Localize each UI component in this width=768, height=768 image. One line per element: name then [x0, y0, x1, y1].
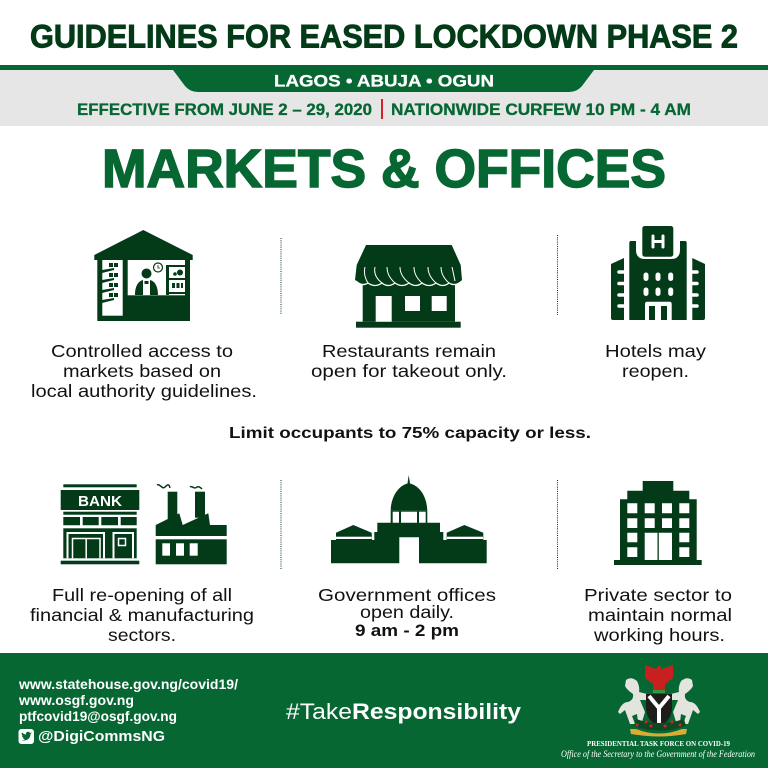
icon: restaurant: [355, 245, 462, 328]
text: government: Government offices: [318, 585, 496, 605]
text: government: [318, 585, 496, 640]
header band: NATIONWIDE CURFEW 10 PM - 4 AM: [391, 100, 691, 119]
text: hotels: reopen.: [622, 361, 689, 381]
footer panel: [0, 653, 768, 768]
text: finance: sectors.: [108, 625, 176, 645]
text: restaurants: open for takeout only.: [311, 361, 507, 381]
text: private sector: maintain normal: [588, 605, 732, 625]
header band: [0, 65, 768, 126]
coat of arms: [618, 665, 700, 736]
contact details: @DigiCommsNG: [38, 728, 165, 745]
text: hotels: [605, 341, 706, 381]
text: markets: markets based on: [63, 361, 221, 381]
text: markets: [31, 341, 257, 401]
icon: factory: [156, 485, 227, 564]
title: GUIDELINES FOR EASED LOCKDOWN PHASE 2: [30, 18, 738, 54]
text: private sector: Private sector to: [584, 585, 732, 605]
dividers: [281, 235, 558, 570]
icon: government building: [331, 475, 487, 563]
hashtag: #Take Responsibility: [286, 699, 522, 724]
text: finance: financial & manufacturing: [30, 605, 254, 625]
text: private sector: working hours.: [593, 625, 725, 645]
main heading: MARKETS & OFFICES: [102, 139, 666, 199]
contact details: [18, 677, 238, 745]
icon: bank: [61, 484, 139, 564]
text: markets: local authority guidelines.: [31, 381, 257, 401]
text: government: 9 am - 2 pm: [355, 621, 459, 640]
contact details: www.statehouse.gov.ng/covid19/: [18, 677, 238, 692]
icon: bank: BANK: [78, 493, 122, 510]
text: private sector: [584, 585, 732, 645]
capacity note: Limit occupants to 75% capacity or less.: [229, 425, 591, 442]
task force caption: [561, 739, 755, 759]
text: restaurants: [311, 341, 507, 381]
text: markets: Controlled access to: [51, 341, 233, 361]
text: government: open daily.: [360, 602, 454, 622]
text: finance: [30, 585, 254, 645]
header band: EFFECTIVE FROM JUNE 2 – 29, 2020: [77, 100, 372, 119]
contact details: www.osgf.gov.ng: [18, 693, 134, 708]
icon: market stall: [94, 230, 193, 321]
text: hotels: Hotels may: [605, 341, 706, 361]
text: finance: Full re-opening of all: [52, 585, 232, 605]
icon: hotel: [611, 226, 705, 320]
icon: office building: [614, 481, 702, 565]
task force caption: PRESIDENTIAL TASK FORCE ON COVID-19: [587, 739, 730, 748]
contact details: ptfcovid19@osgf.gov.ng: [19, 709, 177, 724]
header band: LAGOS • ABUJA • OGUN: [274, 72, 494, 90]
text: restaurants: Restaurants remain: [322, 341, 496, 361]
